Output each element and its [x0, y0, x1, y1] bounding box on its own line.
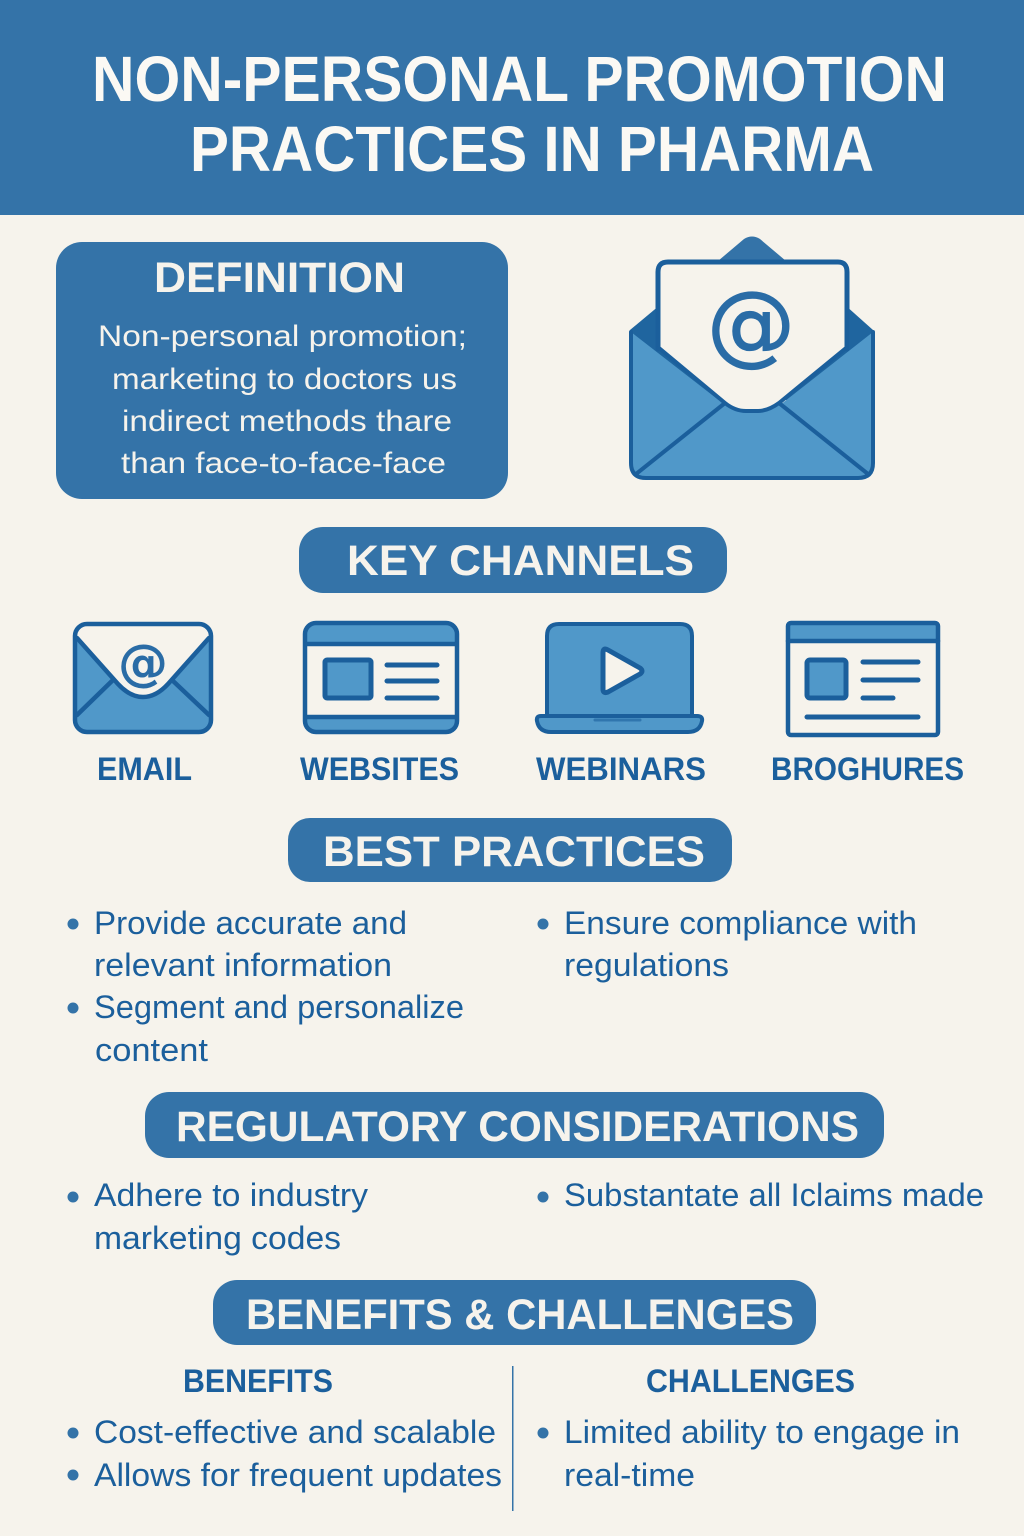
heading: best practices: [288, 818, 732, 882]
label: brochures: BROGHURES: [771, 751, 964, 787]
heading: benefits and challenges: [213, 1280, 816, 1345]
column: benefits: Allows for frequent updates: [94, 1457, 502, 1493]
icon: envelope: @: [118, 634, 168, 692]
list: best practices left: Provide accurate and: [94, 905, 407, 941]
column: challenges: CHALLENGES: [646, 1363, 855, 1399]
title banner: PRACTICES IN PHARMA: [190, 113, 874, 185]
heading: best practices: BEST PRACTICES: [323, 828, 705, 876]
list: best practices right: [538, 905, 917, 983]
column: challenges: Limited ability to engage in: [564, 1414, 960, 1450]
heading: benefits and challenges: BENEFITS & CHALLENGES: [246, 1291, 794, 1339]
column: challenges: [538, 1363, 960, 1493]
channel: brochures: [771, 623, 964, 787]
list: regulatory left: Adhere to industry: [94, 1177, 368, 1213]
icon: open envelope with at sign: [630, 236, 873, 478]
column: benefits: [68, 1363, 502, 1493]
panel: definition: [56, 242, 508, 499]
list: best practices left: content: [95, 1032, 208, 1068]
list: best practices left: relevant information: [94, 947, 392, 983]
channel: webinars: [536, 624, 706, 787]
icon: brochure page: [788, 623, 938, 735]
heading: regulatory considerations: [145, 1092, 884, 1158]
panel: definition: indirect methods thare: [122, 405, 452, 438]
label: webinars: WEBINARS: [536, 751, 706, 787]
list: regulatory right: Substantate all Iclaims made: [564, 1177, 984, 1213]
channel: email: [75, 624, 211, 787]
list: regulatory left: [68, 1177, 368, 1256]
list: best practices left: [68, 905, 464, 1068]
list: best practices right: Ensure compliance with: [564, 905, 917, 941]
heading: key channels: [299, 527, 727, 593]
panel: definition: DEFINITION: [154, 254, 405, 302]
title banner: [0, 0, 1024, 215]
icon: laptop with play button: [537, 624, 702, 732]
list: best practices left: Segment and personalize: [94, 989, 464, 1025]
list: best practices right: regulations: [564, 947, 729, 983]
panel: definition: marketing to doctors us: [112, 363, 457, 396]
column: benefits: BENEFITS: [183, 1363, 333, 1399]
heading: regulatory considerations: REGULATORY CONSIDERATIONS: [176, 1103, 859, 1151]
icon: envelope: [75, 624, 211, 732]
label: email: EMAIL: [97, 751, 192, 787]
icon: web page: [305, 623, 457, 732]
label: websites: WEBSITES: [300, 751, 459, 787]
icon: open envelope with at sign: @: [707, 272, 795, 375]
panel: definition: than face-to-face-face: [121, 447, 446, 480]
heading: key channels: KEY CHANNELS: [347, 537, 694, 585]
title banner: NON-PERSONAL PROMOTION: [92, 43, 947, 115]
column: challenges: real-time: [564, 1457, 695, 1493]
panel: definition: Non-personal promotion;: [98, 320, 467, 353]
column: benefits: Cost-effective and scalable: [94, 1414, 496, 1450]
channel: websites: [300, 623, 459, 787]
list: regulatory left: marketing codes: [94, 1220, 341, 1256]
